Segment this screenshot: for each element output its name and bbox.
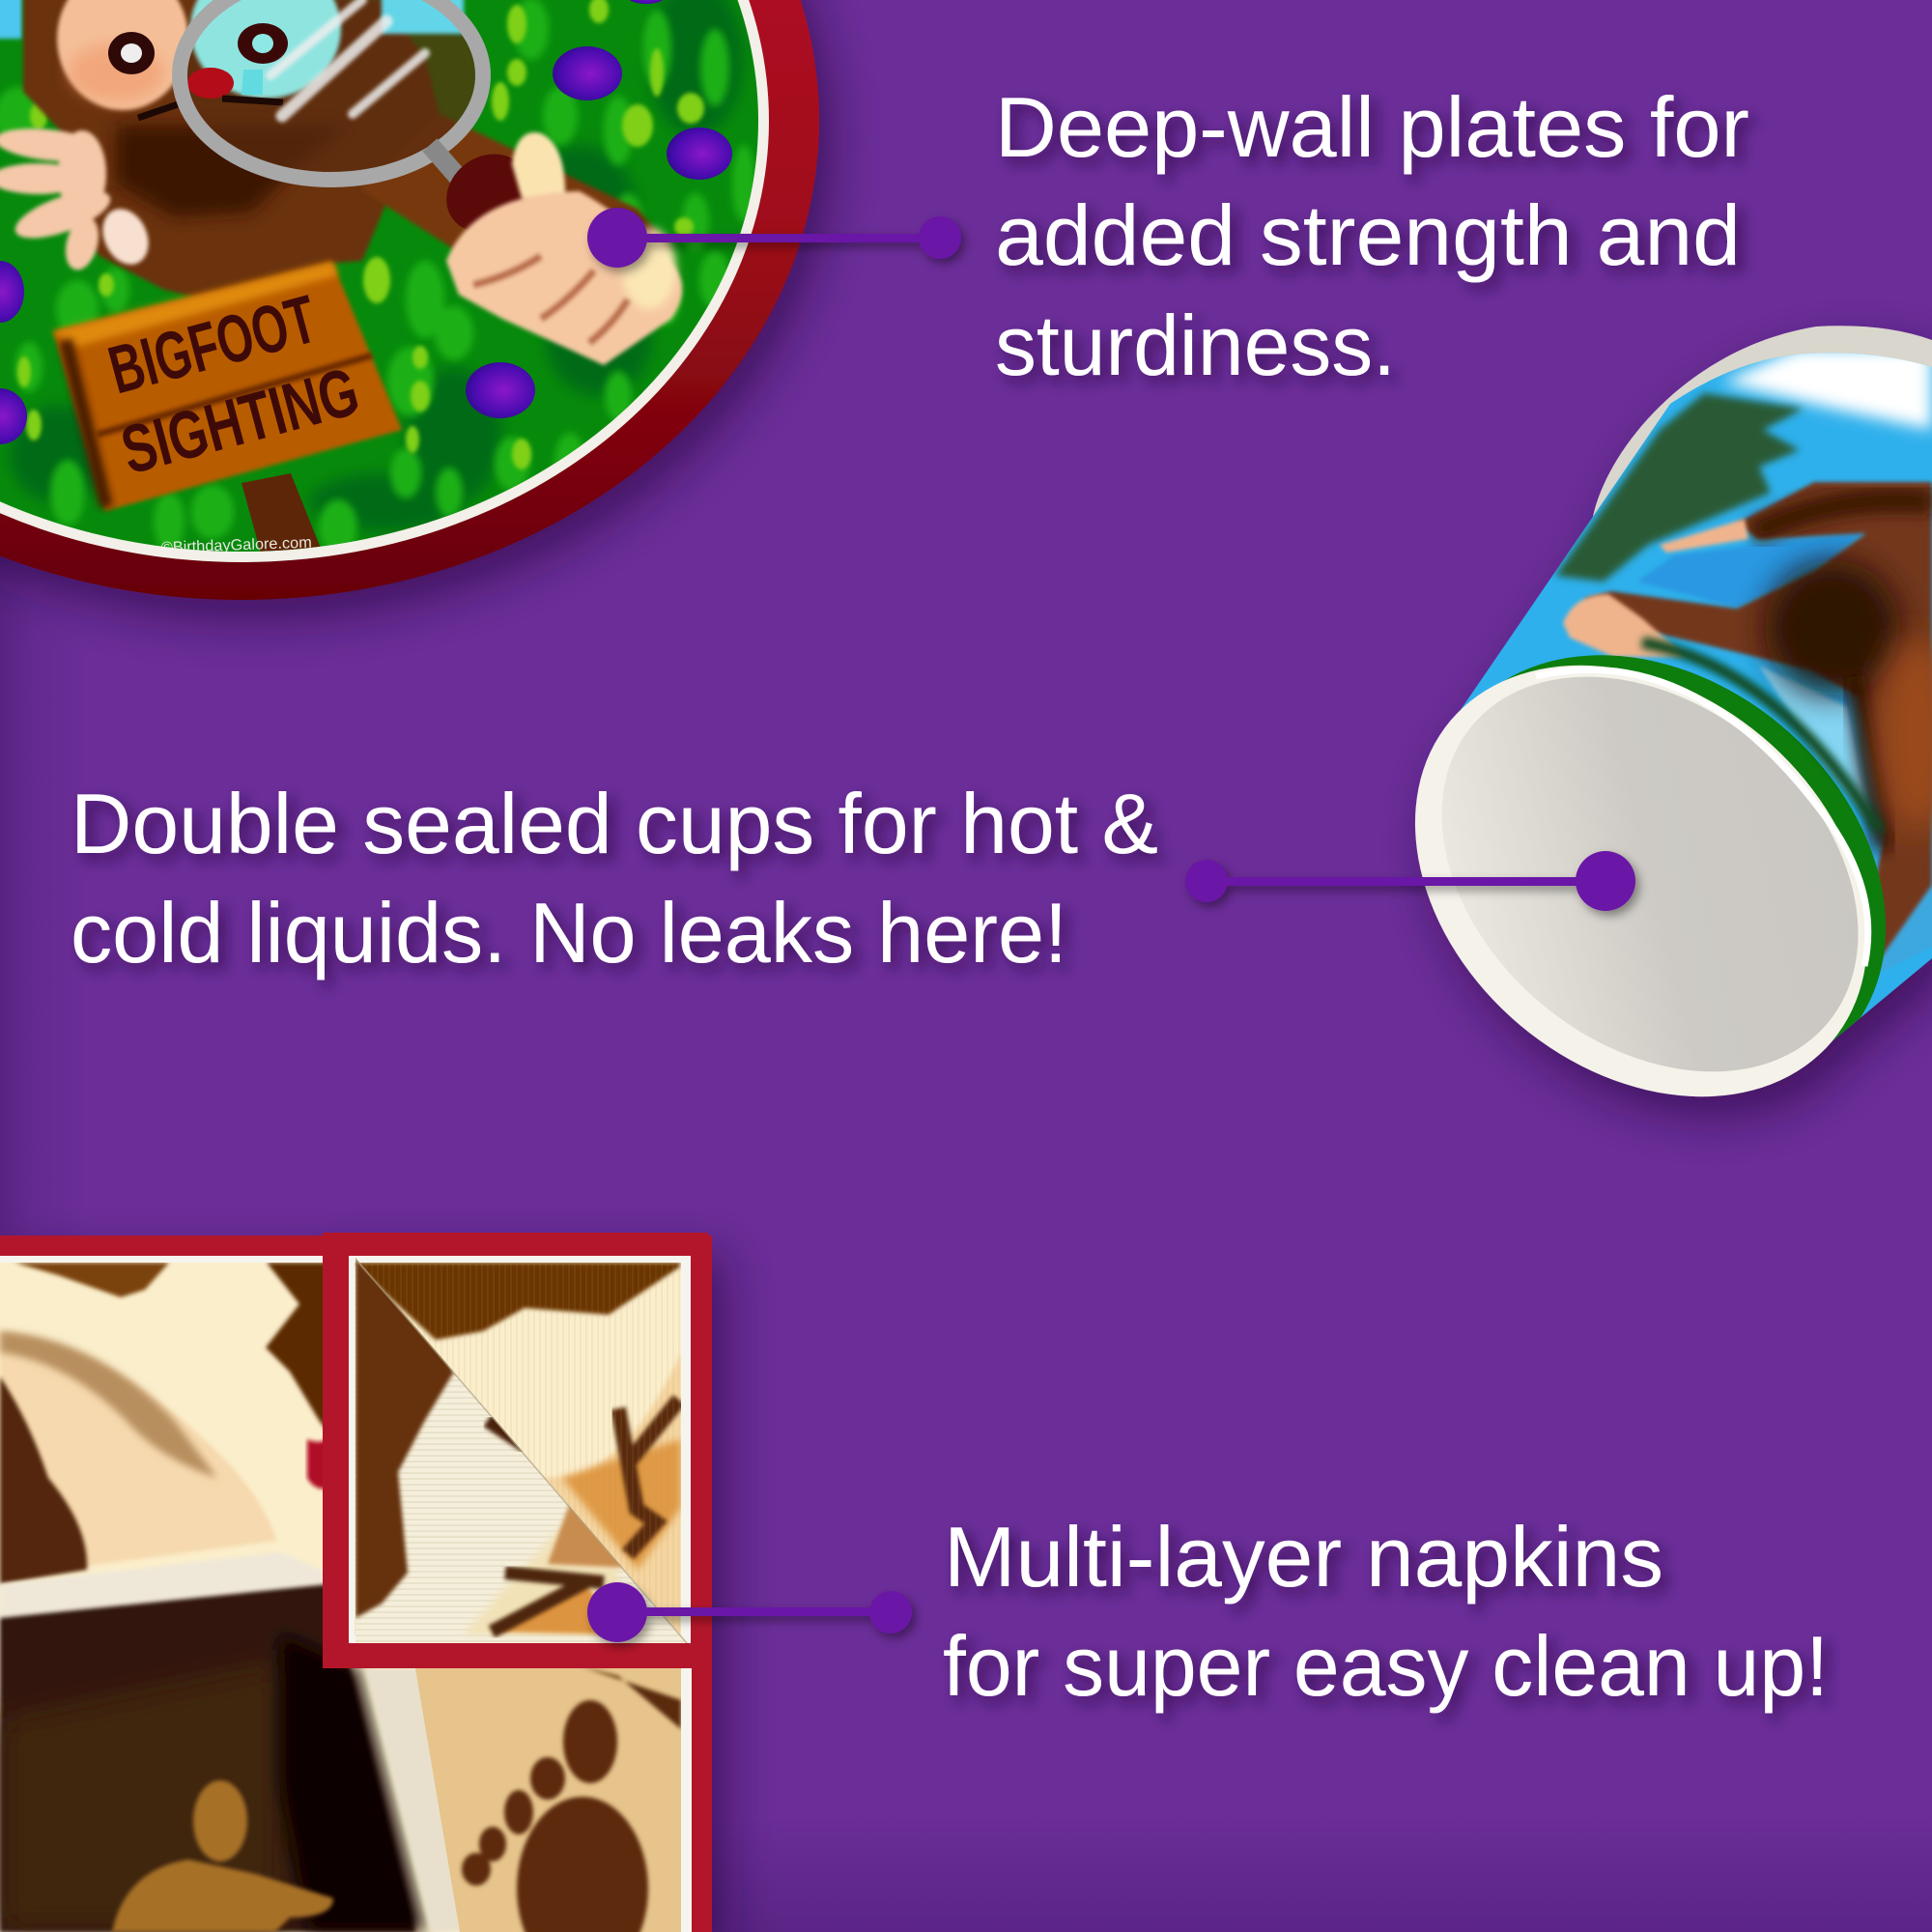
bigfoot mouth: [138, 104, 178, 118]
napkin folded corner border: [323, 1233, 712, 1668]
callout 3: napkin text: for super easy clean up!: [943, 1618, 1829, 1714]
napkin corner artwork: [355, 1263, 681, 1634]
bigfoot body: [23, 0, 440, 299]
cup artwork: [1345, 348, 1932, 1179]
connector: plate: [587, 208, 961, 268]
sky: [0, 0, 22, 39]
right hand: [446, 132, 682, 365]
callout 1: plate text: added strength and: [995, 187, 1741, 283]
callout 2: cup text: Double sealed cups for hot &: [71, 776, 1158, 871]
cup base rim highlight: [1536, 669, 1868, 966]
connector: cup: [1185, 851, 1635, 911]
bigfoot face: [57, 0, 188, 110]
grass band: [1345, 565, 1932, 1179]
sign text: BIGFOOT: [101, 281, 324, 408]
sign text: [101, 281, 366, 488]
magnifying lens: [180, 0, 483, 184]
berries: [0, 0, 732, 444]
plate photo: [0, 0, 819, 600]
napkin back border: [0, 1236, 712, 1932]
callout 1: plate text: Deep-wall plates for: [995, 79, 1749, 175]
callout 3: napkin text: Multi-layer napkins: [944, 1509, 1663, 1605]
napkin white inner border: [0, 1256, 692, 1932]
cup photo: [1329, 326, 1932, 1185]
footprint: [462, 1700, 648, 1932]
bigfoot arm: [360, 114, 671, 253]
cup body: [1452, 353, 1932, 1053]
callout 3: napkin text: [943, 1509, 1829, 1714]
connector: napkin: [587, 1582, 912, 1642]
cave figure: [112, 1780, 333, 1932]
callout 2: cup text: [71, 776, 1158, 980]
napkin folded flap: [349, 1258, 691, 1643]
magnifier handle: [446, 155, 524, 230]
bigfoot beard: [116, 126, 348, 217]
napkin folded corner white border: [349, 1256, 691, 1643]
plate rim: [0, 0, 819, 600]
bigfoot eye: [108, 32, 155, 74]
callout 1: plate text: [995, 79, 1749, 393]
copyright text: ©BirthdayGalore.com: [161, 535, 312, 556]
cup base flange: [1329, 577, 1932, 1185]
cup base: [1364, 596, 1932, 1152]
cup top rim: [1592, 326, 1932, 526]
sign text: SIGHTING: [114, 353, 366, 488]
napkin back artwork: [0, 1263, 681, 1932]
plate artwork: [0, 0, 773, 570]
callout 1: plate text: sturdiness.: [995, 298, 1396, 393]
napkin photo: [0, 1233, 712, 1932]
left hand: [0, 124, 157, 273]
callout 2: cup text: cold liquids. No leaks here!: [71, 885, 1067, 980]
sign post: [242, 473, 324, 560]
plate white inner ring: [0, 0, 769, 562]
wooden sign: [53, 262, 402, 511]
